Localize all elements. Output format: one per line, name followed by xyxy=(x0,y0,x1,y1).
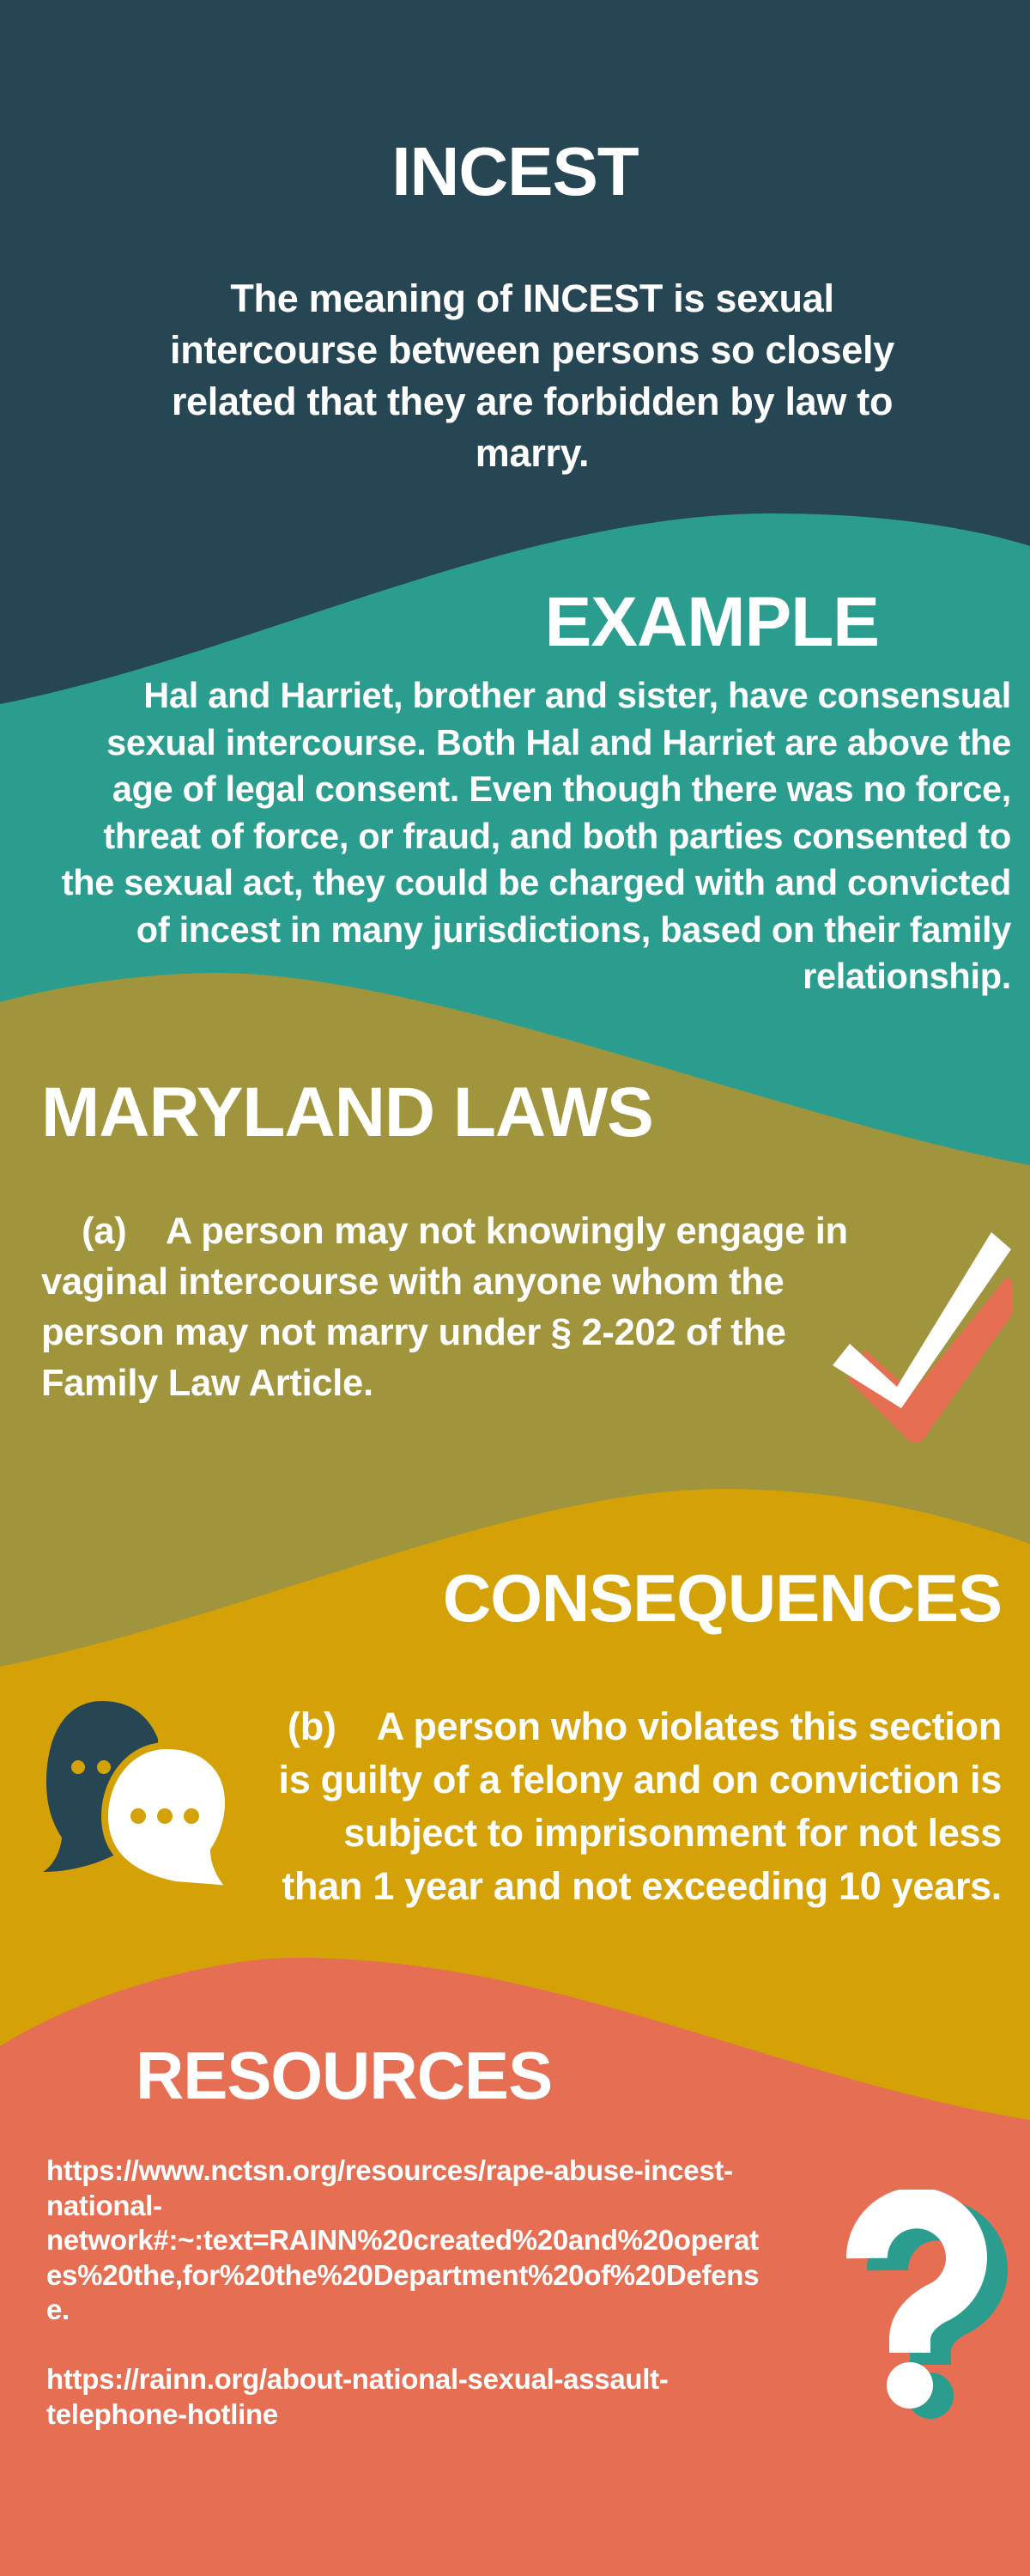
icon: question mark xyxy=(846,2190,1008,2419)
resource links: https://rainn.org/about-national-sexual-assault- xyxy=(46,2363,668,2395)
resource links: e. xyxy=(46,2293,70,2325)
resource links: network#:~:text=RAINN%20created%20and%20operat xyxy=(46,2224,759,2256)
heading: example: EXAMPLE xyxy=(545,583,879,661)
consequences text xyxy=(278,1704,1002,1908)
resource links: telephone-hotline xyxy=(46,2397,278,2430)
consequences text: subject to imprisonment for not less xyxy=(343,1811,1002,1855)
definition text: related that they are forbidden by law to xyxy=(172,380,893,423)
consequences text: (b) A person who violates this section xyxy=(288,1704,1002,1748)
example text: relationship. xyxy=(803,956,1011,996)
example text: the sexual act, they could be charged with and convicted xyxy=(62,862,1011,902)
example text: Hal and Harriet, brother and sister, have consensual xyxy=(143,675,1011,715)
resource links: es%20the,for%20the%20Department%20of%20Defens xyxy=(46,2258,759,2291)
law (a) text: Family Law Article. xyxy=(41,1363,373,1404)
icon: chat bubbles xyxy=(43,1701,225,1886)
law (a) text: vaginal intercourse with anyone whom the xyxy=(41,1261,784,1303)
title: INCEST xyxy=(391,133,639,210)
definition text: The meaning of INCEST is sexual xyxy=(230,276,834,320)
definition text: marry. xyxy=(476,431,589,475)
definition text xyxy=(170,276,894,475)
resource links xyxy=(46,2154,759,2430)
resource links: national- xyxy=(46,2190,162,2221)
icon: checkmark xyxy=(833,1232,1013,1443)
example text: sexual intercourse. Both Hal and Harriet are above the xyxy=(106,721,1011,762)
consequences text: than 1 year and not exceeding 10 years. xyxy=(282,1864,1002,1908)
law (a) text: person may not marry under § 2-202 of the xyxy=(41,1312,786,1353)
example text: threat of force, or fraud, and both parties consented to xyxy=(103,816,1011,855)
heading: resources: RESOURCES xyxy=(136,2038,552,2113)
definition text: intercourse between persons so closely xyxy=(170,328,894,372)
example text: age of legal consent. Even though there was no force, xyxy=(112,769,1011,809)
heading: maryland laws: MARYLAND LAWS xyxy=(41,1073,653,1151)
heading: consequences: CONSEQUENCES xyxy=(443,1560,1002,1636)
example text: of incest in many jurisdictions, based on their family xyxy=(136,908,1011,950)
law (a) text xyxy=(41,1211,848,1404)
law (a) text: (a) A person may not knowingly engage in xyxy=(82,1211,848,1252)
resource links: https://www.nctsn.org/resources/rape-abuse-incest- xyxy=(46,2154,733,2186)
example text xyxy=(62,675,1011,996)
consequences text: is guilty of a felony and on conviction is xyxy=(278,1758,1002,1801)
